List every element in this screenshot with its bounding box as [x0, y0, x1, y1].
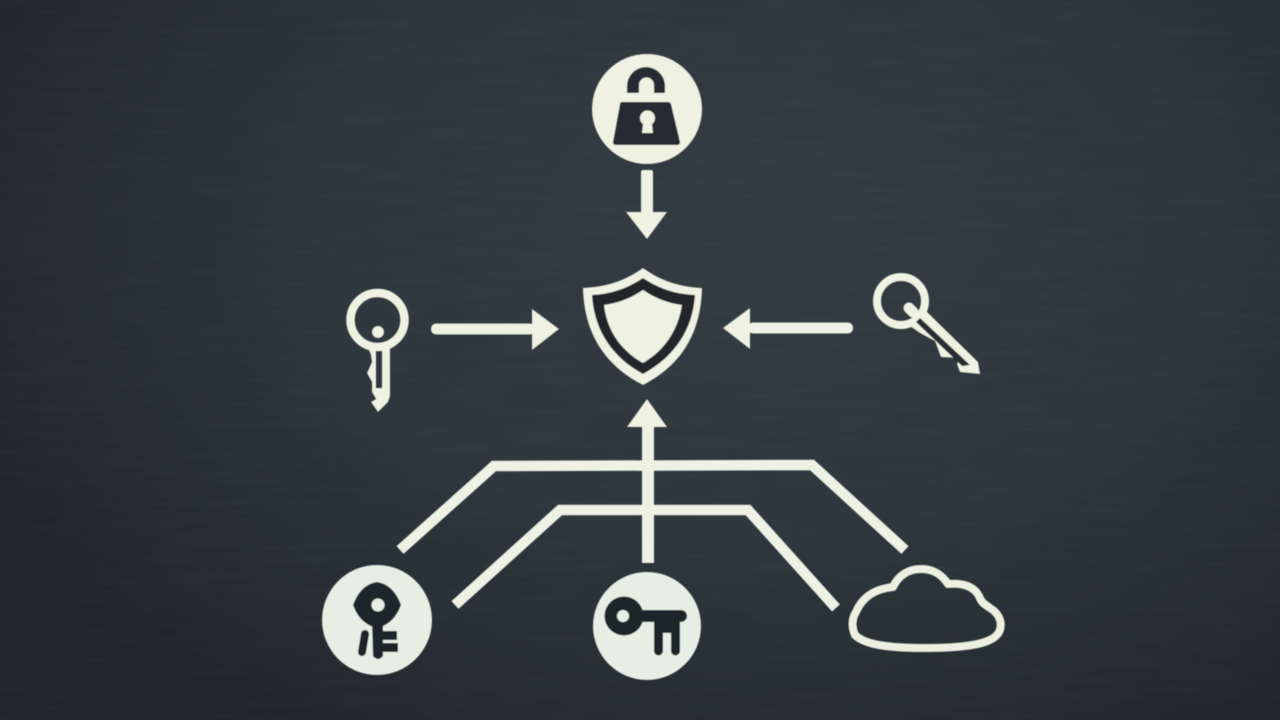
arrow: padlock down to shield [626, 170, 667, 239]
icon: padlock in circle [592, 54, 702, 164]
icon: bottom-centre key in circle [593, 572, 701, 680]
icon: central shield [583, 268, 702, 385]
icon: left outline key [350, 293, 404, 412]
icon: bottom-left key in circle [322, 565, 432, 675]
icon: right outline key [877, 277, 980, 374]
arrow: left key to shield [431, 309, 559, 350]
arrow: right key to shield [723, 308, 853, 349]
icon: cloud outline [852, 569, 1001, 648]
arrow: bottom key up to shield [627, 399, 667, 563]
connector: lower network line [455, 510, 836, 608]
connector: upper network line [400, 465, 905, 550]
